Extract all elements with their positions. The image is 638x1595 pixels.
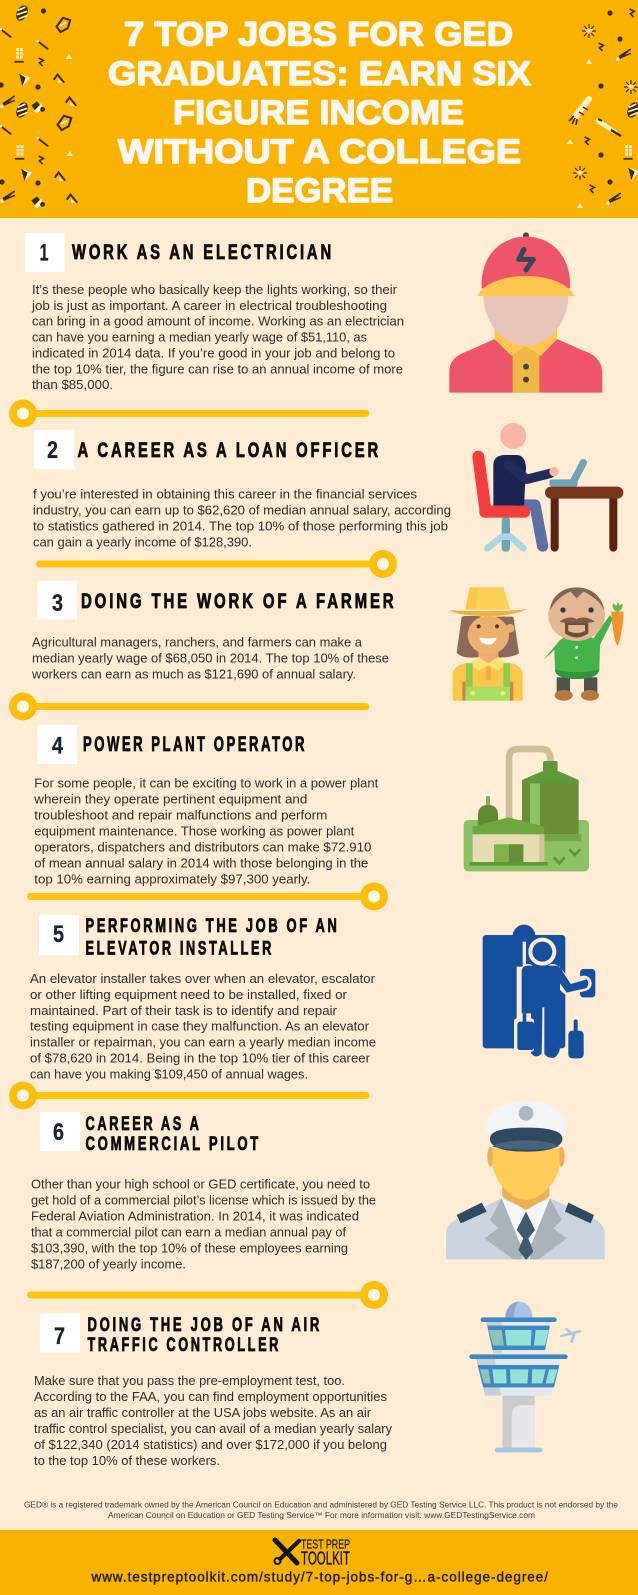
number badge 3: 3 bbox=[52, 590, 63, 617]
number badge 7 bbox=[40, 1314, 80, 1352]
body text 1: can have you earning a median yearly wage of $51,110, as bbox=[32, 330, 367, 344]
panel: job 7 air traffic controller bbox=[34, 1302, 580, 1468]
body text 4: equipment maintenance. Those working as power plant bbox=[34, 824, 355, 838]
icon: loan officer at desk bbox=[478, 423, 623, 552]
icon: control tower bbox=[469, 1302, 580, 1452]
heading 5: PERFORMING THE JOB OF AN bbox=[86, 915, 340, 937]
body text 6: Other than your high school or GED certificate, you need to bbox=[31, 1176, 370, 1192]
body text 7: to the top 10% of these workers. bbox=[34, 1453, 220, 1468]
body text 1: indicated in 2014 data. If you’re good in your job and belong to bbox=[32, 346, 395, 360]
body text 7: According to the FAA, you can find employment opportunities bbox=[34, 1389, 387, 1404]
body text 3 bbox=[31, 634, 389, 682]
heading 6: CAREER AS A bbox=[86, 1113, 202, 1135]
body text 6 bbox=[31, 1176, 376, 1272]
body text 4: of mean annual salary in 2014 with those belonging in the bbox=[34, 856, 368, 870]
heading 6 bbox=[86, 1113, 261, 1155]
title: WITHOUT A COLLEGE bbox=[118, 133, 521, 171]
body text 4: operators, dispatchers and distributors can make $72.910 bbox=[34, 840, 371, 854]
number badge 6 bbox=[40, 1112, 80, 1151]
number badge 6: 6 bbox=[53, 1119, 64, 1146]
heading 6: COMMERCIAL PILOT bbox=[86, 1133, 261, 1155]
number badge 3 bbox=[38, 581, 77, 620]
logo: TEST PREP bbox=[301, 1538, 350, 1552]
title: 7 TOP JOBS FOR GED bbox=[124, 16, 513, 54]
body text 5: testing equipment in case they malfunction. As an elevator bbox=[30, 1018, 370, 1034]
icon: crossed tools bbox=[274, 1540, 299, 1564]
heading 5: ELEVATOR INSTALLER bbox=[86, 938, 274, 960]
number badge 5: 5 bbox=[53, 921, 64, 948]
connector line 4 bbox=[27, 882, 388, 910]
body text 6: get hold of a commercial pilot’s license which is issued by the bbox=[31, 1192, 376, 1208]
connector line 5 bbox=[9, 1082, 370, 1110]
footer band bbox=[0, 1530, 638, 1595]
icon: electrician bbox=[449, 232, 602, 393]
logo bbox=[274, 1538, 350, 1568]
heading 3: DOING THE WORK OF A FARMER bbox=[81, 590, 396, 613]
body text 5: An elevator installer takes over when an elevator, escalator bbox=[30, 971, 376, 986]
heading 7: TRAFFIC CONTROLLER bbox=[88, 1334, 281, 1356]
body text 7: of $122,340 (2014 statistics) and over $172,000 if you belong bbox=[34, 1437, 387, 1452]
icon: elevator installer bbox=[483, 925, 595, 1060]
heading 4: POWER PLANT OPERATOR bbox=[83, 733, 307, 756]
confetti left bbox=[0, 4, 77, 208]
body text 2: f you’re interested in obtaining this career in the financial services bbox=[33, 486, 417, 502]
body text 6: that a commercial pilot can earn a median annual pay of bbox=[31, 1224, 346, 1240]
body text 4: For some people, it can be exciting to work in a power plant bbox=[34, 776, 379, 790]
icon: farmers bbox=[449, 587, 624, 701]
body text 4: troubleshoot and repair malfunctions and perform bbox=[34, 808, 327, 822]
body text 1 bbox=[31, 282, 404, 392]
body text 4: top 10% earning approximately $97,300 yearly. bbox=[34, 872, 310, 886]
body text 5: installer or repairman, you can earn a yearly median income bbox=[30, 1034, 376, 1050]
body text 3: Agricultural managers, ranchers, and farmers can make a bbox=[32, 634, 363, 650]
body text 2: can gain a yearly income of $128,390. bbox=[33, 534, 252, 550]
body text 2: industry, you can earn up to $62,620 of median annual salary, according bbox=[33, 502, 451, 518]
body text 4: wherein they operate pertinent equipment and bbox=[33, 792, 307, 806]
heading 5 bbox=[86, 915, 340, 960]
number badge 4 bbox=[38, 725, 77, 764]
body text 6: $103,390, with the top 10% of these employees earning bbox=[31, 1240, 348, 1256]
body text 6: $187,200 of yearly income. bbox=[31, 1256, 186, 1272]
panel: job 1 electrician bbox=[9, 232, 602, 428]
heading 7 bbox=[88, 1314, 322, 1356]
body text 1: can bring in a good amount of income. Working as an electrician bbox=[32, 314, 404, 328]
panel: job 4 power plant operator bbox=[27, 725, 589, 910]
body text 3: median yearly wage of $68,050 in 2014. The top 10% of these bbox=[32, 650, 389, 666]
heading 2: A CAREER AS A LOAN OFFICER bbox=[78, 439, 381, 462]
panel: job 2 loan officer bbox=[33, 423, 623, 578]
connector line 1 bbox=[9, 400, 370, 428]
body text 2 bbox=[33, 486, 451, 550]
body text 1: than $85,000. bbox=[32, 377, 113, 392]
body text 2: to statistics gathered in 2014. The top 10% of those performing this job bbox=[33, 518, 448, 534]
icon: man farmer with carrot bbox=[543, 587, 624, 701]
number badge 1 bbox=[25, 233, 64, 272]
icon: woman farmer bbox=[449, 587, 527, 701]
title: FIGURE INCOME bbox=[173, 94, 464, 132]
panel: job 5 elevator installer bbox=[9, 915, 595, 1110]
title: DEGREE bbox=[246, 172, 393, 210]
body text 3: workers can earn as much as $121,690 of annual salary. bbox=[31, 666, 356, 682]
body text 7: Make sure that you pass the pre-employment test, too. bbox=[34, 1373, 345, 1388]
disclaimer bbox=[24, 1501, 619, 1520]
number badge 2: 2 bbox=[47, 437, 58, 464]
body text 7: traffic control specialist, you can avail of a median yearly salary bbox=[34, 1421, 393, 1436]
connector line 3 bbox=[9, 692, 370, 720]
confetti right bbox=[567, 9, 638, 208]
icon: power plant bbox=[464, 749, 589, 871]
number badge 2 bbox=[34, 430, 74, 469]
heading 7: DOING THE JOB OF AN AIR bbox=[88, 1314, 322, 1336]
panel: job 3 farmer bbox=[9, 581, 624, 720]
body text 5: or other lifting equipment need to be installed, fixed or bbox=[30, 987, 348, 1002]
disclaimer: GED® is a registered trademark owned by the American Council on Education and administered by GED Testing Service LLC. This product is not endorsed by the bbox=[24, 1501, 619, 1510]
number badge 1: 1 bbox=[40, 240, 48, 266]
title bbox=[108, 16, 531, 210]
body text 6: Federal Aviation Administration. In 2014, it was indicated bbox=[31, 1208, 359, 1224]
number badge 7: 7 bbox=[54, 1323, 65, 1350]
disclaimer: American Council on Education or GED Testing Service™ For more information visit: www.GEDTestingService.com bbox=[108, 1511, 535, 1520]
body text 1: job is just as important. A career in electrical troubleshooting bbox=[31, 298, 387, 313]
title: GRADUATES: EARN SIX bbox=[108, 55, 531, 93]
number badge 5 bbox=[39, 915, 79, 955]
icon: pilot bbox=[446, 1101, 605, 1260]
body text 5: of $78,620 in 2014. Being in the top 10% tier of this career bbox=[30, 1050, 371, 1066]
body text 5 bbox=[30, 971, 376, 1082]
heading 1: WORK AS AN ELECTRICIAN bbox=[72, 241, 334, 264]
body text 5: can have you making $109,450 of annual wages. bbox=[30, 1066, 308, 1082]
body text 1: the top 10% tier, the figure can rise to an annual income of more bbox=[32, 362, 403, 376]
connector line 6 bbox=[27, 1281, 388, 1309]
number badge 4: 4 bbox=[52, 732, 64, 760]
logo: TOOLKIT bbox=[301, 1548, 350, 1568]
url: www.testpreptoolkit.com/study/7-top-jobs-for-g…a-college-degree/ bbox=[90, 1570, 548, 1584]
connector line 2 bbox=[36, 550, 397, 578]
body text 5: maintained. Part of their task is to identify and repair bbox=[30, 1003, 338, 1018]
body text 4 bbox=[33, 776, 379, 886]
body text 1: It’s these people who basically keep the lights working, so their bbox=[32, 282, 398, 297]
header band bbox=[0, 0, 638, 218]
body text 7 bbox=[34, 1373, 393, 1468]
panel: job 6 commercial pilot bbox=[27, 1101, 605, 1309]
body text 7: as an air traffic controller at the USA jobs website. As an air bbox=[34, 1405, 372, 1420]
